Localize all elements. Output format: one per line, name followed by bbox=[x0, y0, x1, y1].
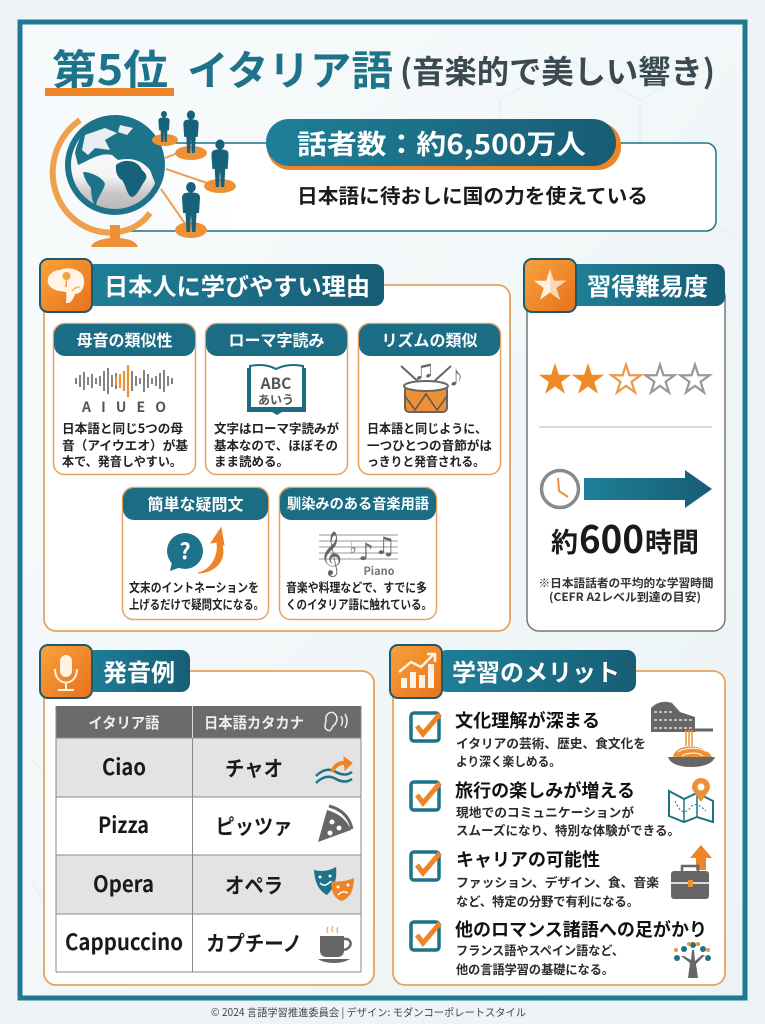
row: Opera: オペラ bbox=[225, 870, 283, 900]
panel: pronunciation bbox=[40, 645, 374, 985]
row: Pizza bbox=[98, 808, 292, 841]
row: Pizza: ピッツァ bbox=[216, 811, 292, 841]
study hours: 600 bbox=[579, 509, 644, 564]
icon: pizza bbox=[318, 806, 352, 842]
icon: sheet music: ♭ bbox=[349, 539, 357, 557]
romaji text: 文字はローマ字読みが bbox=[214, 418, 339, 437]
icon: coffee cup bbox=[318, 926, 351, 963]
vowels text: 本で、発音しやすい。 bbox=[62, 451, 182, 470]
benefits heading: 学習のメリット bbox=[452, 653, 620, 688]
difficulty heading bbox=[572, 264, 725, 306]
icon: sheet music: Piano bbox=[363, 563, 395, 579]
speakers pill: 話者数：約6,500万人 bbox=[297, 123, 586, 162]
title: 第5位 bbox=[52, 37, 168, 98]
star rating bbox=[539, 363, 710, 394]
romaji text bbox=[214, 418, 339, 470]
card: rhythm: リズムの類似 bbox=[381, 327, 478, 351]
row: Cappuccino: Cappuccino bbox=[65, 925, 183, 957]
benefit: career bbox=[411, 845, 712, 910]
benefit: romance languages: 他のロマンス諸語への足がかり bbox=[455, 916, 707, 942]
music terms text: くのイタリア語に触れている。 bbox=[286, 594, 432, 613]
benefit: romance languages: フランス語やスペイン語など、 bbox=[456, 940, 624, 959]
title: (音楽的で美しい響き) bbox=[400, 47, 715, 93]
icon: briefcase and arrow bbox=[671, 845, 712, 899]
pronunciation heading bbox=[86, 650, 190, 692]
icon: sheet music: ♫ bbox=[374, 532, 396, 560]
card: vowels bbox=[54, 324, 196, 474]
icon: brain bbox=[40, 259, 92, 312]
speakers description: 日本語に待おしに国の力を使えている bbox=[297, 180, 648, 209]
row: Pizza: Pizza bbox=[98, 808, 149, 840]
vowels text: 日本語と同じ5つの母 bbox=[62, 418, 183, 437]
row: Opera bbox=[93, 867, 283, 900]
icon: growth chart bbox=[390, 645, 442, 698]
benefit: culture: イタリアの芸術、歴史、食文化を bbox=[456, 733, 646, 752]
card: music terms bbox=[280, 488, 436, 620]
difficulty note: (CEFR A2レベル到達の目安) bbox=[549, 589, 701, 605]
icon: drum: ♫ bbox=[416, 358, 434, 383]
icon: tree bbox=[674, 942, 711, 978]
difficulty note bbox=[538, 575, 714, 605]
icon: star bbox=[524, 259, 576, 312]
benefit: culture: より深く楽しめる。 bbox=[456, 751, 561, 770]
vowels text: 音（アイウエオ）が基 bbox=[62, 435, 188, 454]
benefit: travel: スムーズになり、特別な体験ができる。 bbox=[456, 820, 680, 839]
arrow bbox=[584, 470, 712, 508]
benefit: romance languages: 他の言語学習の基礎になる。 bbox=[456, 959, 614, 978]
questions text bbox=[129, 577, 264, 613]
rhythm text bbox=[367, 418, 492, 470]
card: romaji: ローマ字読み bbox=[228, 327, 325, 351]
questions text: 文末のイントネーションを bbox=[129, 577, 259, 596]
icon: globe with people bbox=[53, 110, 236, 247]
rhythm text: 日本語と同じように、 bbox=[367, 418, 487, 437]
icon: book: あいう bbox=[258, 391, 294, 408]
icon: drum bbox=[401, 358, 465, 412]
romaji text: 基本なので、ほぼその bbox=[214, 435, 338, 454]
icon: microphone bbox=[40, 645, 92, 698]
icon: question and arrow: ? bbox=[179, 534, 191, 566]
card: rhythm bbox=[358, 324, 500, 474]
difficulty note: ※日本語話者の平均的な学習時間 bbox=[538, 575, 714, 591]
icon: ear bbox=[325, 712, 347, 731]
card: romaji bbox=[206, 324, 348, 474]
panel: difficulty bbox=[524, 259, 725, 631]
card: vowels: AIUEO bbox=[81, 397, 166, 417]
benefit: culture: 文化理解が深まる bbox=[455, 707, 600, 733]
study hours bbox=[551, 509, 699, 564]
card: vowels: 母音の類似性 bbox=[76, 327, 173, 351]
title: イタリア語 bbox=[187, 37, 393, 97]
benefit: romance languages bbox=[411, 916, 711, 978]
romaji text: まま読める。 bbox=[214, 451, 289, 470]
icon: theatre masks bbox=[314, 867, 354, 901]
benefit: career: ファッション、デザイン、食、音楽 bbox=[456, 872, 659, 891]
icon: sheet music: ♪ bbox=[358, 538, 374, 566]
benefit: travel bbox=[411, 777, 713, 839]
music terms text: 音楽や料理などで、すでに多 bbox=[286, 577, 427, 596]
benefit: career: など、特定の分野で有利になる。 bbox=[456, 891, 639, 910]
study hours: 約 bbox=[551, 521, 578, 560]
rhythm text: 一つひとつの音節がは bbox=[367, 435, 492, 454]
row: Opera: Opera bbox=[93, 867, 154, 899]
pronunciation table: イタリア語 bbox=[88, 712, 160, 733]
row: Cappuccino bbox=[65, 925, 302, 958]
icon: book bbox=[247, 365, 306, 415]
footer: © 2024 言語学習推進委員会 | デザイン: モダンコーポレートスタイル bbox=[211, 1005, 526, 1020]
icon: question and arrow bbox=[167, 528, 224, 573]
card: questions bbox=[122, 488, 268, 620]
benefit: career: キャリアの可能性 bbox=[456, 846, 600, 872]
card: music terms: 馴染みのある音楽用語 bbox=[287, 493, 429, 514]
speakers pill bbox=[266, 119, 621, 170]
row: Ciao: チャオ bbox=[225, 753, 283, 783]
icon: sound wave bbox=[76, 368, 172, 394]
icon: book: ABC bbox=[260, 372, 291, 394]
panel: reasons bbox=[40, 259, 510, 631]
panel: benefits bbox=[390, 645, 725, 985]
rhythm text: っきりと発音される。 bbox=[367, 451, 485, 470]
title bbox=[45, 37, 715, 98]
reasons heading: 日本人に学びやすい理由 bbox=[104, 267, 370, 302]
study hours: 時間 bbox=[645, 521, 699, 560]
music terms text bbox=[286, 577, 432, 613]
vowels text bbox=[62, 418, 188, 470]
pronunciation table bbox=[56, 706, 361, 972]
icon: sheet music bbox=[319, 531, 398, 579]
benefit: travel: 旅行の楽しみが増える bbox=[455, 777, 635, 803]
icon: drum: ♪ bbox=[447, 364, 465, 390]
difficulty heading: 習得難易度 bbox=[587, 267, 708, 302]
icon: sheet music: 𝄞 bbox=[320, 531, 342, 577]
icon: colosseum and pasta bbox=[651, 702, 715, 767]
row: Ciao bbox=[102, 750, 283, 783]
benefit: travel: 現地でのコミュニケーションが bbox=[456, 802, 634, 821]
pronunciation table: 日本語カタカナ bbox=[204, 712, 304, 733]
card: questions: 簡単な疑問文 bbox=[147, 491, 244, 515]
icon: map bbox=[669, 778, 713, 822]
row: Cappuccino: カプチーノ bbox=[206, 928, 302, 958]
benefit: culture bbox=[411, 702, 715, 770]
speakers box bbox=[115, 119, 716, 231]
pronunciation heading: 発音例 bbox=[103, 653, 175, 688]
icon: wave arrow bbox=[316, 757, 352, 783]
row: Ciao: Ciao bbox=[102, 750, 146, 782]
icon: clock bbox=[542, 470, 578, 508]
questions text: 上げるだけで疑問文になる。 bbox=[129, 594, 264, 613]
